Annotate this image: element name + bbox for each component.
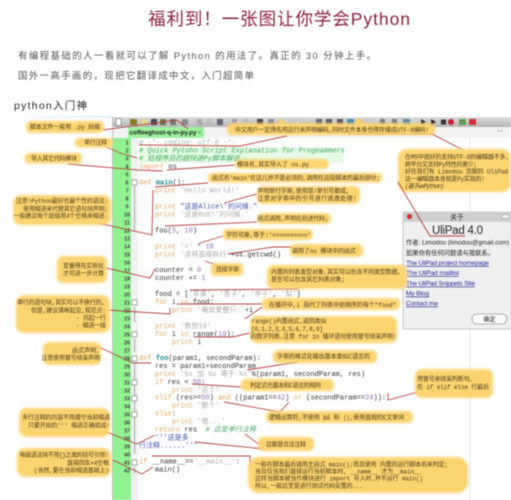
callout: condition: 判定式也基本和C语言的相同 — [250, 381, 321, 389]
code listing: import os — [139, 164, 177, 172]
line number gutter — [113, 138, 138, 500]
callout: single line comment: 单行注释 — [84, 139, 107, 147]
callout: block quotes — [17, 448, 111, 477]
callout: in loop: 在循环中,i 指代了列表中依顺序的每个"food" — [269, 301, 396, 309]
code listing: print '数到10' — [155, 321, 211, 331]
line number gutter: 24 — [124, 324, 131, 330]
callout: range function: 的数字列表,注意 for in 循环语句使用冒号结束声明! — [250, 332, 396, 340]
line number gutter: 11 — [124, 220, 130, 226]
callout: block quotes: (当然,要在当前缩进基础上) — [34, 466, 109, 474]
callout: logic operators: 逻辑运算符,不使用 && 和 ||,使用直观的E文单词 — [269, 414, 404, 422]
panel: about dialog: The UliPad Snippets Site — [406, 280, 475, 288]
line number gutter: 9 — [125, 204, 129, 210]
line number gutter: 37 — [124, 428, 130, 434]
callout: main script note: 所以,一般这里是进行测试代码安置的... — [255, 482, 363, 490]
line number gutter: 23 — [124, 316, 130, 322]
code listing: main() — [155, 466, 180, 474]
line number gutter: 33 — [124, 396, 130, 402]
callout: string format — [273, 350, 377, 363]
code listing: print '那个' — [172, 402, 220, 411]
code listing: # Quick Pytohn Script Explanation for Progeammers — [139, 148, 345, 156]
panel: about dialog: UliPad 4.0 — [432, 225, 483, 237]
callout: function declaration: 函式声明, — [72, 346, 100, 354]
line number gutter: 26 — [124, 340, 130, 346]
line number gutter: 3 — [125, 156, 129, 162]
callout: indentation note: 使用缩进来代替其它语句块声明; — [23, 205, 108, 213]
code listing: print '这个' — [172, 385, 220, 395]
code listing: print '这将直接执行'+os.getcwd() — [155, 249, 281, 259]
line number gutter: 27 — [124, 348, 130, 354]
line number gutter: 22 — [124, 308, 130, 314]
callout: single-line block: 单行的语句块,其实可以不换行的, — [17, 298, 105, 306]
callout: variable instantiate: 才可进一步计算 — [63, 270, 104, 278]
title: 福利到！一张图让你学会Python — [148, 9, 410, 29]
line number gutter: 15 — [124, 252, 130, 258]
callout: string multiply: 字符可乘,等于:'==========' — [226, 231, 311, 239]
callout: string concat — [211, 263, 243, 276]
callout: main function name: 函式名'main'在这儿并不是必须的,调用在这段脚本的最后部分; — [212, 174, 380, 182]
connector lines — [68, 120, 463, 474]
intro text block: 国外一高手画的，现把它翻译成中文，入门超简单 — [18, 70, 254, 82]
callout: variable instantiate — [57, 256, 107, 283]
code listing: counter = 0 — [155, 267, 201, 275]
intro text block: 有编程基础的人一看就可以了解 Python 的用法了。真正的 30 分钟上手。 — [18, 50, 376, 62]
line number gutter: 42 — [124, 468, 130, 474]
code listing: elif (res>=50) and ((param1==42) or (secondParam==24)): — [155, 395, 386, 403]
callout: single-line block — [16, 295, 110, 333]
callout: module name: 模块名,其实导入了 os.py — [237, 160, 309, 168]
panel: about dialog: 如果你有任何问题请与我联系。 — [406, 248, 494, 257]
callout: indentation note: 注意!Python最好也最个性的语法: — [16, 197, 108, 205]
line number gutter: 14 — [124, 244, 131, 250]
code listing: for i in food: — [155, 299, 214, 307]
toolbar — [113, 117, 511, 127]
code listing — [139, 140, 386, 474]
panel: about dialog — [403, 212, 511, 329]
callout: os module call: 调用了os 模块中的函式 — [292, 247, 356, 255]
callout: in loop — [262, 298, 400, 310]
callout: block quotes: 每级语法块不用{}之类的括号引领! — [20, 451, 108, 459]
line number gutter: 35 — [124, 412, 130, 418]
line number gutter: 18 — [124, 276, 130, 282]
callout: legal comments: 这都是合法注释 — [266, 440, 306, 448]
panel: about dialog: 关于 — [450, 212, 464, 222]
callout: indentation note: 一般建议每个层级用4个空格来缩进. — [14, 212, 108, 220]
line number gutter: 19 — [124, 284, 130, 290]
right margin line — [469, 138, 471, 500]
code listing: def foo(param1, secondParam): — [139, 355, 261, 363]
tab bar: ◂ ▸ — [497, 128, 504, 134]
code listing: print '俺就爱整只:'+i — [172, 305, 253, 315]
callout: range function: range()内置函式,返回类似 — [252, 317, 326, 325]
fold markers — [132, 180, 137, 474]
line number gutter: 10 — [124, 212, 130, 218]
callout: block quotes: 直接回车+4空格 — [67, 459, 109, 467]
callout: function declaration: 注意使用冒号结束声明 — [42, 354, 100, 362]
panel: about dialog: 作者: Limodou (limodou@gmail.com) — [406, 238, 509, 246]
callout: string concat: 连接字串 — [216, 266, 239, 274]
callout: encoding declaration: 中文用户一定得先用这行来声明编码,同时文件本身也得存储成UTF-8编码! — [235, 126, 429, 134]
line number gutter: 4 — [125, 164, 129, 170]
line number gutter: 13 — [124, 236, 130, 242]
line number gutter: 30 — [124, 372, 130, 378]
tab bar: coffeeghost-q-in-py.py — [130, 130, 197, 136]
code listing: print '这是Bob\'的问候.' — [155, 209, 249, 219]
line number gutter: 7 — [125, 188, 129, 194]
line number gutter: 41 — [124, 460, 130, 466]
code listing: # -*- coding: utf-8 -*- — [139, 140, 236, 148]
callout: multi-line comment: 多行注释的内容不用遵守当前缩进 — [22, 414, 110, 422]
line number gutter: 8 — [125, 196, 129, 202]
comment highlight — [139, 147, 344, 163]
callout: ulipad editor: 这一编辑器本身就是Py实现的! — [405, 175, 485, 183]
line number gutter: 12 — [124, 228, 130, 234]
code listing: print '=' * 10 — [155, 243, 214, 251]
code listing: print "这是Alice\'的问候." — [155, 202, 257, 212]
line number gutter: 28 — [124, 356, 130, 362]
code listing: print 'Hello World!' — [155, 188, 239, 196]
panel: about dialog: My Blog — [406, 290, 429, 298]
code listing: print '嗯...' — [172, 418, 225, 427]
line number gutter: 38 — [124, 436, 130, 442]
line number gutter: 17 — [124, 268, 130, 274]
panel: code editor — [112, 117, 511, 500]
line number gutter: 39 — [124, 444, 130, 450]
callout: string declaration: 声明单行字串,使用双/单引号都成, — [258, 187, 350, 195]
code listing: print '%s 加 %s 等于 %s'%(param1, secondParam, res) — [155, 369, 365, 379]
callout: import modules — [25, 153, 82, 164]
code listing: print i — [172, 339, 201, 347]
callout: colon ends condition — [415, 369, 493, 398]
callout: ulipad editor: (基于wxPython) — [405, 182, 444, 190]
code listing: return res # 这是单行注释 — [155, 426, 257, 435]
tab bar: × — [198, 130, 202, 136]
callout: os module call — [290, 244, 363, 257]
callout: string declaration: 注意对字串中的引号进行逃逸处理! — [258, 194, 356, 202]
callout: function call: 函式调用,声明在后述代码; — [258, 214, 328, 222]
callout: multi-line comment: 只要开始的''' 缩进正确就成! — [28, 421, 110, 429]
section heading: python入门神 — [14, 99, 87, 112]
line number gutter: 2 — [125, 148, 129, 154]
callout: legal comments — [258, 437, 314, 451]
panel: about dialog: The UliPad maillist — [406, 270, 459, 277]
callout: single line comment — [75, 138, 113, 148]
code listing: '''这是多 — [155, 433, 189, 443]
code listing: # 给程序员的超快速Py脚本解说 — [139, 155, 241, 164]
callout: ulipad editor: 在MS中很好的支持UTF-8的编辑器不多, — [405, 153, 509, 161]
panel: about dialog: Contact me — [406, 300, 438, 308]
callout: range function: [0,1,2,3,4,5,6,7,8,9] — [251, 326, 323, 333]
panel: about dialog: 确定 — [483, 316, 496, 324]
callout: main script note: 一般在脚本最后调用主函式 main();而且使用 内置的运行脚本名来判定; — [255, 460, 448, 468]
line number gutter: 21 — [124, 300, 130, 306]
code listing: def main(): — [139, 180, 185, 188]
code listing: foo(5, 10) — [155, 227, 197, 235]
panel: about dialog: The UliPad project homepage — [406, 260, 489, 267]
top divider — [0, 116, 113, 118]
callout: string format: 字串的格式化输出基本类似C语言的 — [277, 352, 370, 360]
callout: encoding declaration — [227, 123, 435, 135]
code listing: else: — [155, 411, 176, 419]
line number gutter: 20 — [124, 292, 130, 298]
callout: indentation note — [13, 195, 111, 225]
code listing: if __name__=='__main__': — [139, 458, 240, 466]
callout: variable instantiate: 变量得先实例化 — [63, 262, 104, 270]
callout: condition — [241, 379, 334, 391]
code listing: for i in range(10): — [155, 331, 235, 339]
code listing: if res < 50: — [155, 379, 205, 387]
callout: file extension — [26, 121, 104, 133]
tab bar — [113, 127, 511, 138]
callout: single-line block: - 缩进一级 — [76, 322, 106, 330]
callout: main script note: 这样当脚本被当作模块进行 import 导入时,并不运行 main() — [255, 474, 423, 482]
callout: string multiply — [223, 229, 313, 240]
intro text block — [18, 50, 376, 82]
callout: function call — [257, 213, 331, 224]
callout: single-line block: 但是,建议清晰起见,规范点: — [31, 306, 106, 314]
callout: builtin list — [267, 265, 407, 289]
code listing: food = ['苹果', '杏子', '李子', '梨'] — [155, 289, 301, 299]
callout: import modules: 导入其它代码模块 — [31, 154, 77, 162]
callout: builtin list: 甚至可以包含其它列表对象; — [271, 276, 345, 284]
line number gutter: 32 — [124, 388, 130, 394]
code listing: counter += 1 — [155, 275, 205, 283]
callout: ulipad editor: 好在我们有 Limodou 贡献的 UliPad — [405, 168, 508, 176]
arrow: ulipad pointer — [398, 182, 465, 236]
callout: colon ends condition: 用冒号来结束判断句, — [417, 375, 473, 383]
callout: ulipad editor: 跨平台又支持Py特性的更少; — [405, 160, 477, 168]
line number gutter: 40 — [124, 452, 130, 458]
callout: main script note — [248, 457, 468, 493]
line number gutter: 5 — [125, 172, 129, 178]
callout: file extension: 脚本文件一般用 .py 后缀 — [30, 123, 100, 131]
callout: ulipad editor — [398, 149, 511, 192]
callout: colon ends condition: 在 if elif else 行最后 — [417, 383, 489, 391]
callout: module name — [235, 159, 329, 169]
line number gutter: 29 — [124, 364, 130, 370]
line number gutter: 31 — [124, 380, 130, 386]
callout: logic operators — [266, 411, 413, 423]
callout: range function — [250, 316, 397, 343]
callout: string declaration — [257, 186, 360, 204]
code listing: 行注释......''' — [139, 441, 198, 451]
line number gutter: 6 — [125, 180, 129, 186]
callout: builtin list: 内置的列表类型对象,其实可以包含不同类型数据, — [271, 268, 401, 276]
line number gutter: 36 — [124, 420, 130, 426]
line number gutter: 16 — [124, 260, 130, 266]
line number gutter: 1 — [125, 140, 129, 146]
callout: main script note: 当且仅当我们直接运行当前脚本时, __name__ 才为__main__ — [255, 468, 421, 476]
line number gutter: 34 — [124, 404, 131, 410]
callout: single-line block: - 另起一行 — [76, 314, 106, 322]
code listing: res = param1+secondParam — [155, 363, 256, 371]
line number gutter: 25 — [124, 332, 130, 338]
callout: multi-line comment — [19, 408, 110, 437]
callout: function declaration — [42, 342, 101, 365]
